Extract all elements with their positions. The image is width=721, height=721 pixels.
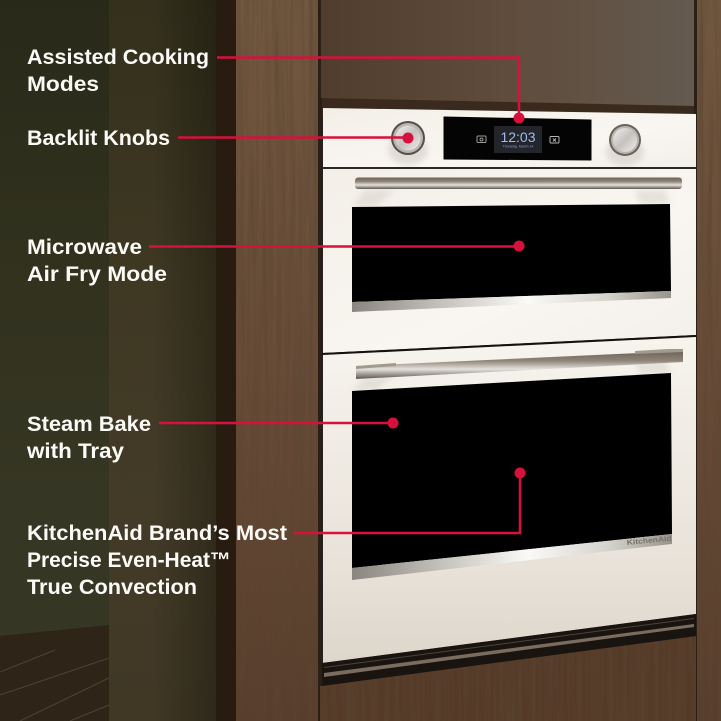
window trim xyxy=(352,534,672,580)
wood cabinetry xyxy=(236,0,721,721)
callout: even-heat true convection xyxy=(27,468,526,599)
callout: assisted cooking modes: Assisted Cooking xyxy=(27,46,209,69)
vent xyxy=(322,614,696,686)
oven xyxy=(322,108,696,686)
icon: cancel button xyxy=(550,136,559,143)
callout: assisted cooking modes: Modes xyxy=(27,73,99,96)
callout: microwave air fry mode xyxy=(27,236,524,286)
callout: steam bake with tray: with Tray xyxy=(26,440,124,463)
callout: steam bake with tray: Steam Bake xyxy=(27,413,151,436)
callout: even-heat true convection: Precise Even-Heat™ xyxy=(27,549,231,572)
callout: even-heat true convection: KitchenAid Brand’s Most xyxy=(27,522,287,545)
window xyxy=(352,204,671,302)
callout: steam bake with tray xyxy=(26,413,399,463)
callout: backlit knobs: Backlit Knobs xyxy=(27,127,170,150)
right knob xyxy=(606,124,644,166)
icon: camera button xyxy=(477,136,486,142)
upper microwave door xyxy=(323,169,696,353)
handle xyxy=(356,349,683,379)
callout: assisted cooking modes xyxy=(27,46,524,124)
clock screen: 12:03 xyxy=(500,129,536,145)
lower oven door xyxy=(323,337,696,663)
window trim xyxy=(352,291,671,312)
callout: microwave air fry mode: Air Fry Mode xyxy=(27,263,167,286)
left knob xyxy=(388,121,428,165)
clock screen xyxy=(494,126,542,153)
callout: microwave air fry mode: Microwave xyxy=(27,236,142,259)
brand mark: KitchenAid xyxy=(626,534,672,547)
callout: backlit knobs xyxy=(27,127,414,150)
clock screen: Thursday, March 14 xyxy=(503,144,533,148)
window xyxy=(352,373,672,568)
callout: even-heat true convection: True Convection xyxy=(27,576,197,599)
handle xyxy=(355,178,682,189)
control panel xyxy=(323,108,696,168)
background: kitchen wall and floor xyxy=(0,0,236,721)
